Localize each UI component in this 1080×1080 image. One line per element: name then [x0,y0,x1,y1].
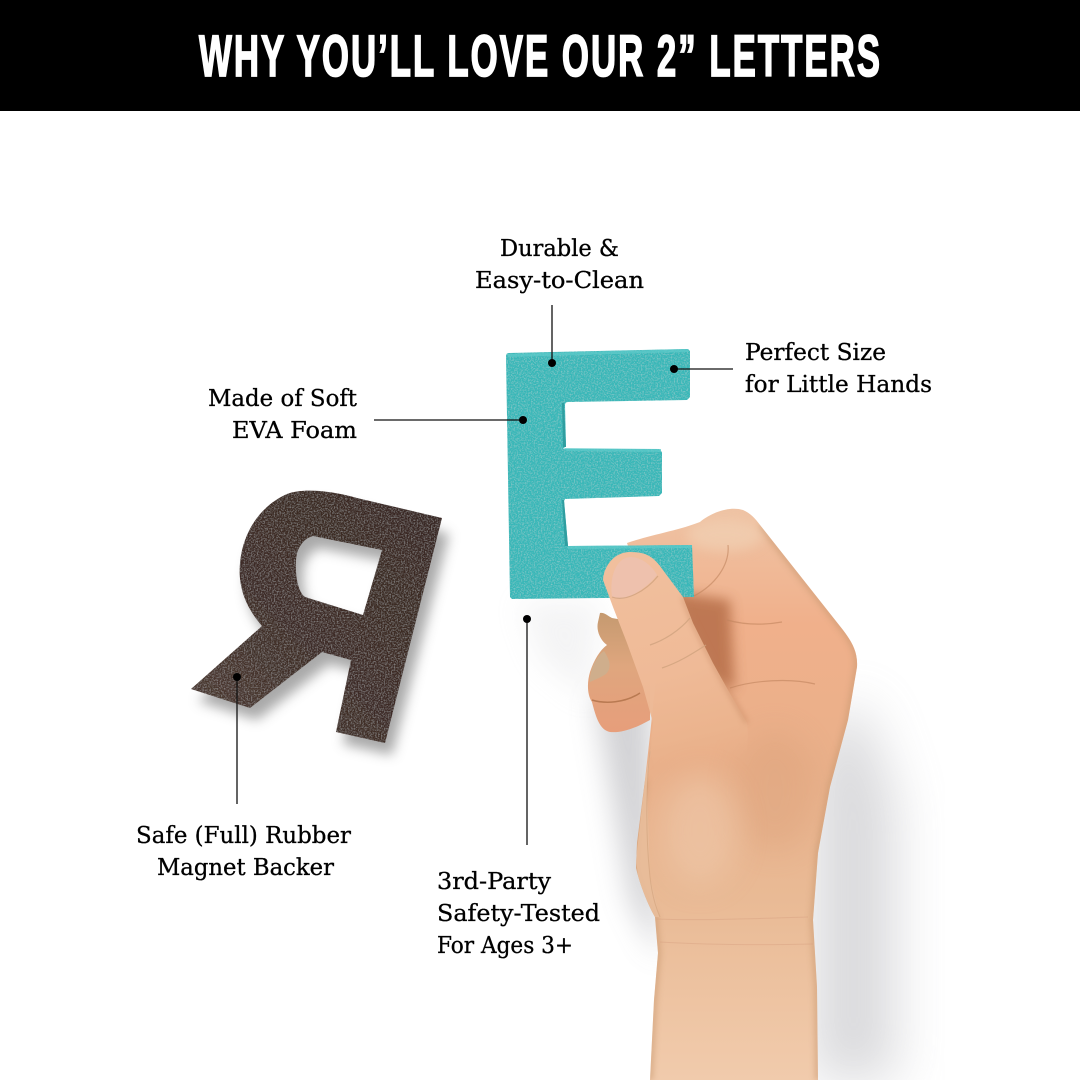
hand holding letter [588,509,857,1080]
label text [745,338,932,398]
curled fingers [588,613,650,732]
fingernail [590,651,610,682]
finger crease [592,693,640,702]
letter R magnet back [191,491,449,755]
label text: Safety-Tested [437,899,600,927]
callout: safety tested [437,615,600,959]
label text [475,234,644,294]
letter R shadow [198,502,449,755]
label text [136,821,352,881]
label text: Perfect Size [745,338,886,366]
label text: Magnet Backer [157,853,335,881]
callout: perfect size [670,338,932,398]
wrist creases [656,917,813,945]
palm creases [647,740,660,917]
label text: 3rd-Party [437,867,552,895]
hand shadow [520,602,895,1080]
letter R shape [191,491,442,743]
thumb creases [612,576,706,668]
leader line [523,615,531,845]
label text: Easy-to-Clean [475,266,644,294]
label text [437,867,600,959]
thumb [603,552,748,790]
title: WHY YOU’LL LOVE OUR 2” LETTERS [199,25,880,89]
leader line [670,365,733,373]
letter E teal foam [506,349,694,599]
leader line [374,416,527,424]
callout: durable and easy to clean [475,234,644,367]
knuckle creases [694,545,815,688]
palm and arm [627,509,857,1080]
palm shading [636,519,857,1080]
header bar [0,0,1080,111]
label text: for Little Hands [745,370,932,398]
label text: EVA Foam [232,416,357,444]
thumbnail [611,557,657,599]
label text: For Ages 3+ [437,931,573,959]
label text: Made of Soft [208,384,358,412]
leader line [233,673,241,804]
callout: rubber magnet backer [136,673,352,881]
label text: Durable & [500,234,619,262]
label text: Safe (Full) Rubber [136,821,352,849]
label text [208,384,358,444]
thumb right edge shadow [683,597,747,723]
leader line [548,305,556,367]
callout: made of soft EVA foam [208,384,527,444]
